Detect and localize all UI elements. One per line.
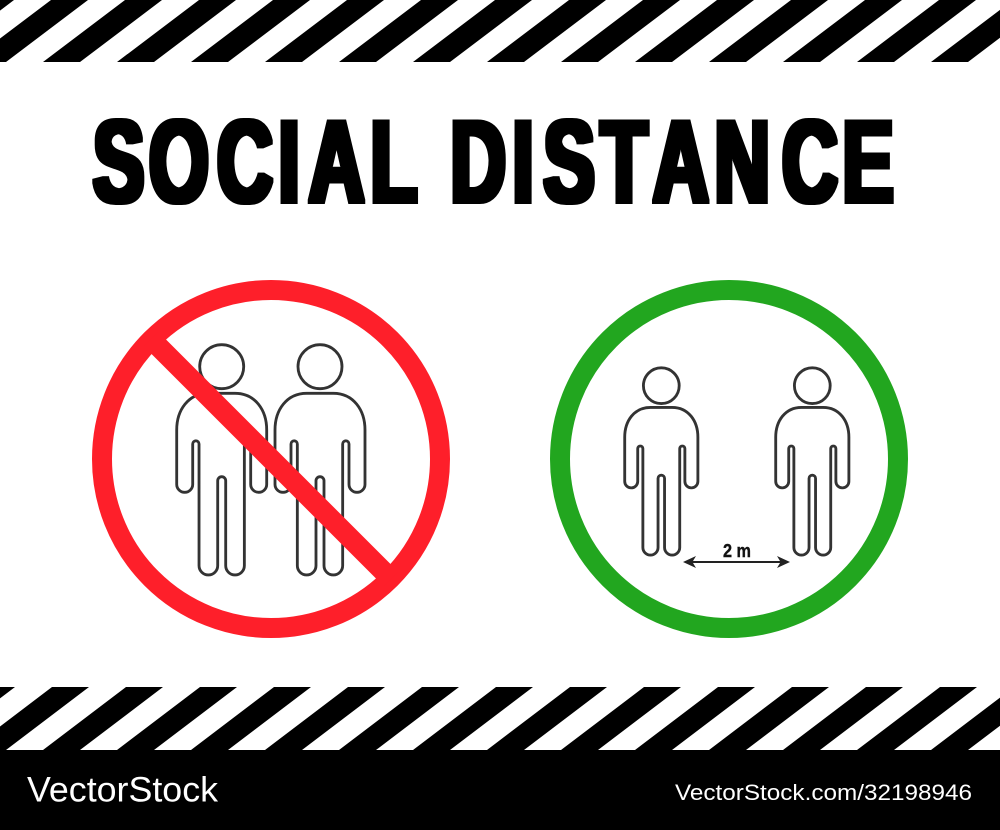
top hazard stripe band <box>0 0 1000 62</box>
red prohibition slash <box>151 339 391 579</box>
footer image url: VectorStock.com/32198946 <box>675 780 972 805</box>
bottom hazard stripe band <box>0 687 1000 750</box>
title: SOCIAL DISTANCE <box>93 96 894 227</box>
footer brand: VectorStock <box>27 770 218 810</box>
green ring <box>560 290 898 628</box>
person left, distanced <box>625 368 698 555</box>
arrow: 2 metre distance <box>683 556 790 568</box>
panel: correct distancing <box>560 290 898 628</box>
footer bar <box>0 750 1000 830</box>
person left, too close <box>177 345 267 575</box>
distance label: 2 m <box>723 541 751 561</box>
panel: prohibited close contact <box>102 290 440 628</box>
person right, distanced <box>776 368 849 555</box>
red prohibition ring <box>102 290 440 628</box>
person right, too close <box>275 345 365 575</box>
